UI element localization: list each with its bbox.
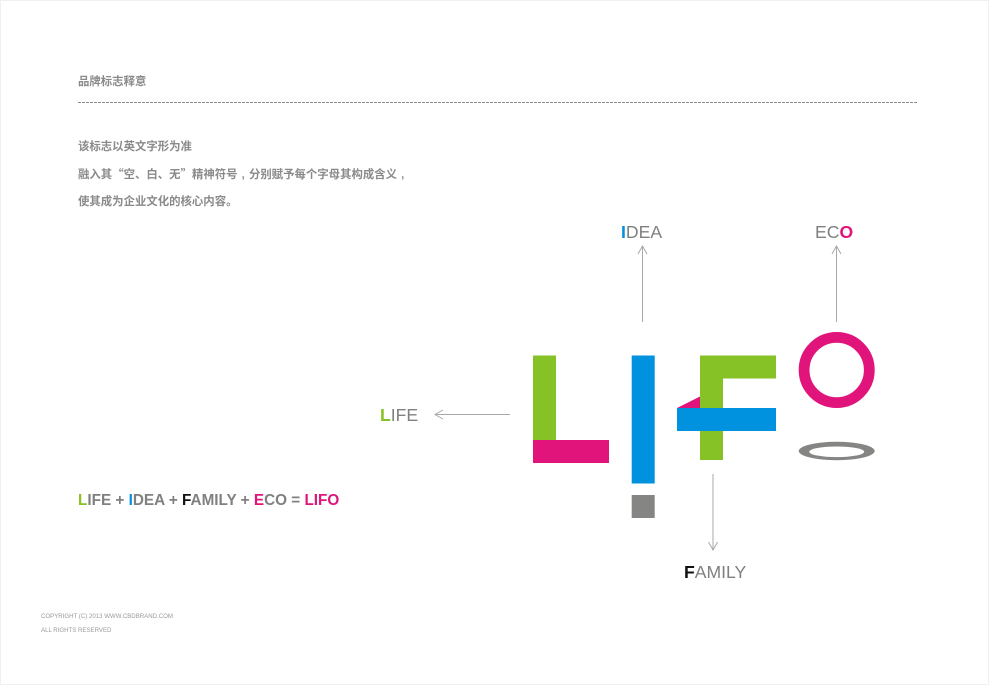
label: FAMILY: FAMILY [684, 562, 746, 582]
arrow: to LIFE [435, 410, 510, 419]
logo letter I [632, 356, 655, 518]
label: ECO: ECO [815, 222, 853, 242]
formula: LIFE + IDEA + FAMILY + ECO = LIFO: LIFE + IDEA + FAMILY + ECO = LIFO [78, 492, 339, 509]
text block: logo description [78, 140, 404, 208]
text block: logo description: 融入其“空、白、无”精神符号 分别赋予每个字母其构成含义 [78, 166, 397, 182]
arrow: to IDEA [638, 246, 647, 322]
heading: brand logo meaning: 品牌标志释意 [78, 76, 146, 88]
logo letter O [799, 337, 875, 460]
label: LIFE: LIFE [380, 405, 418, 425]
label: IDEA: IDEA [621, 222, 662, 242]
copyright text: COPYRIGHT (C) 2013 WWW.CBDBRAND.COM [41, 613, 173, 620]
text block: logo description: 该标志以英文字形为准 [78, 141, 192, 153]
arrow: to FAMILY [708, 474, 718, 550]
text block: logo description: , [242, 169, 245, 181]
arrow: to ECO [832, 246, 841, 322]
copyright text: ALL RIGHTS RESERVED [41, 626, 111, 634]
text block: logo description: , [401, 169, 404, 181]
copyright text [41, 613, 173, 634]
logo letter L [533, 356, 609, 463]
text block: logo description: 使其成为企业文化的核心内容。 [78, 196, 237, 208]
logo letter F [677, 356, 776, 460]
